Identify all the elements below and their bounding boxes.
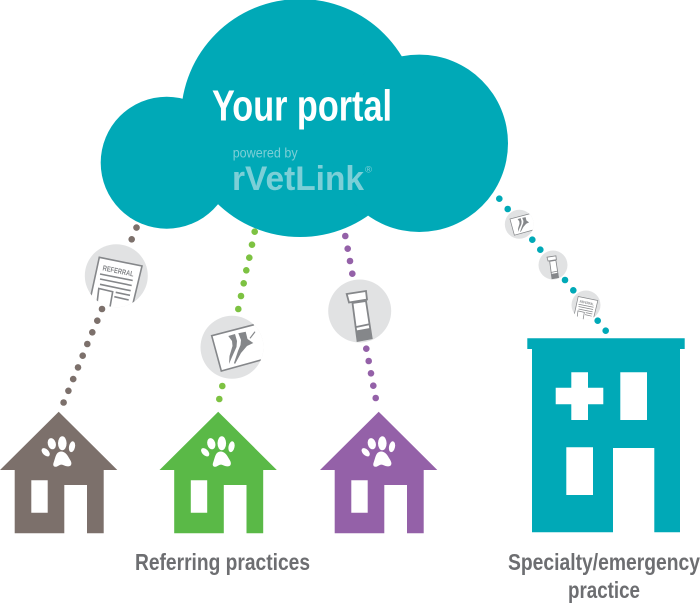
- paw print: [40, 436, 76, 467]
- logo: powered by rVetLink: rVetLink: [232, 160, 364, 198]
- connector: green dotted line: [216, 228, 258, 402]
- icon: sample tube: [328, 280, 391, 342]
- paw print: [200, 436, 236, 467]
- icon: referral document: REFERRAL: [102, 263, 135, 279]
- icon: x-ray: [200, 316, 261, 379]
- paw print: [360, 436, 396, 467]
- logo: powered by rVetLink: powered by: [233, 146, 298, 161]
- label: Referring practices: Referring practices: [135, 549, 310, 575]
- icon: small referral document: REFERRAL: [579, 300, 594, 306]
- connector: brown dotted line: [60, 224, 140, 406]
- icon: brown house: [0, 412, 117, 533]
- icon: purple house: [320, 412, 437, 533]
- icon: green house: [160, 412, 277, 533]
- icon: small referral document: [572, 291, 600, 322]
- cloud: [101, 0, 508, 237]
- connector: teal dotted line: [496, 195, 609, 334]
- logo: powered by rVetLink: ®: [365, 164, 372, 176]
- logo: powered by rVetLink: [232, 146, 372, 198]
- icon: small x-ray: [504, 210, 533, 239]
- icon: small tube: [539, 251, 567, 279]
- icon: referral document: [85, 244, 148, 312]
- title: Your portal: Your portal: [212, 82, 392, 130]
- label: Specialty/emergency practice: [508, 549, 700, 603]
- icon: hospital building: [527, 338, 685, 532]
- label: Specialty/emergency practice: practice: [568, 577, 640, 603]
- connector: purple dotted line: [342, 233, 379, 401]
